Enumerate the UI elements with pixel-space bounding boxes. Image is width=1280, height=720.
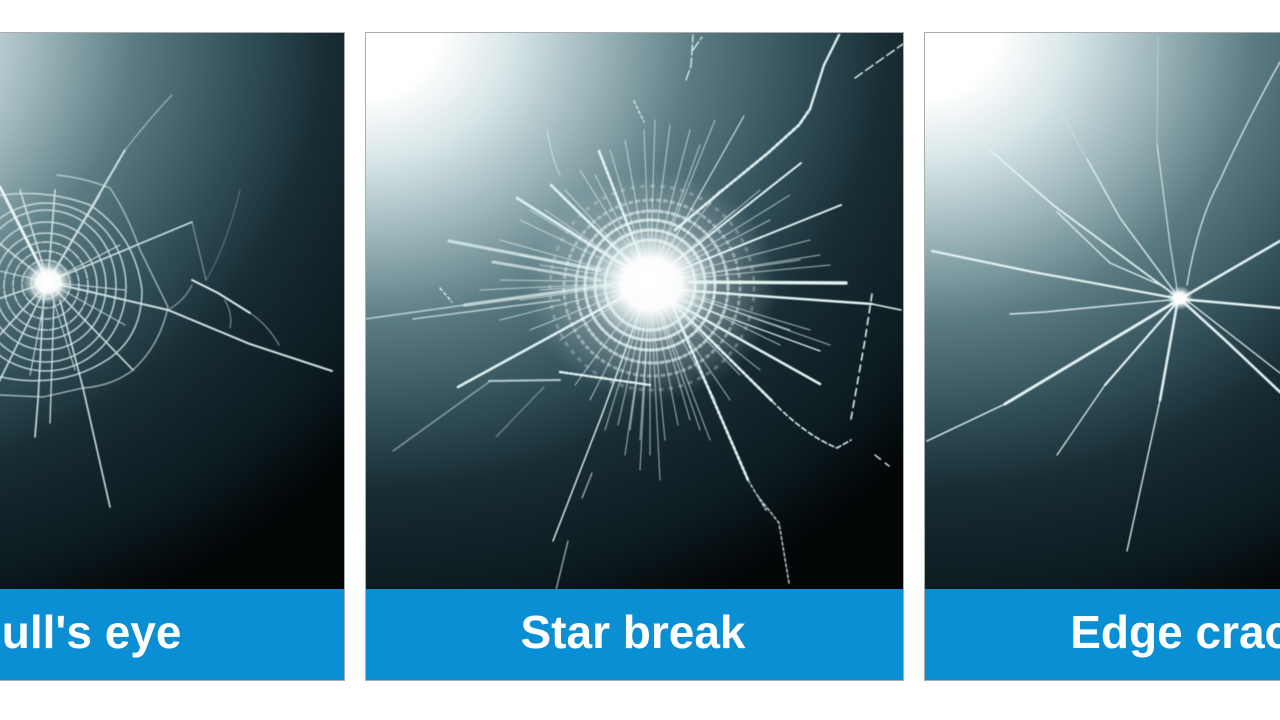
glass background: bull's eye [0, 33, 344, 589]
panel: bull's eye [0, 32, 345, 681]
crack pattern: bull's eye web [0, 95, 332, 507]
glow: impact centre [588, 232, 713, 338]
frame: bull's eye panel border [0, 32, 345, 681]
label: star break: Star break [520, 606, 746, 658]
frame: star break panel border [365, 32, 904, 681]
haze: shatter halo [538, 181, 770, 394]
crack pattern: star break [365, 35, 903, 590]
fine radial rays [480, 120, 830, 480]
bright thick rays [365, 116, 901, 590]
dotted long cracks [440, 35, 903, 583]
spokes [0, 95, 332, 507]
glass background: star break [366, 33, 903, 589]
glow: impact point [22, 259, 74, 305]
blue label bar: star break [366, 589, 903, 680]
panel: edge crack [924, 32, 1280, 681]
concentric rings [0, 175, 168, 397]
long cracks [927, 37, 1280, 551]
speckled shatter rings [550, 186, 754, 390]
glass background: edge crack [925, 33, 1280, 589]
blue label bar: edge crack [925, 589, 1280, 680]
panel: star break [365, 32, 904, 681]
glow: impact point [1167, 286, 1193, 310]
crack pattern: edge crack [927, 37, 1280, 551]
blue label bar: bull's eye [0, 589, 344, 680]
frame: edge crack panel border [924, 32, 1280, 681]
